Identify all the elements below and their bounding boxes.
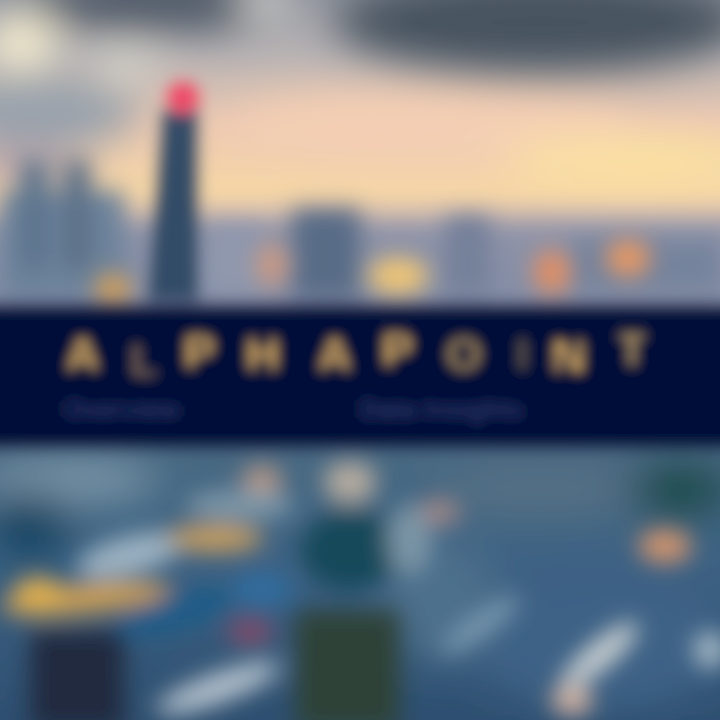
title text: O xyxy=(446,328,482,380)
subtitle text: Data Insights xyxy=(360,394,523,424)
dark title band xyxy=(0,305,720,447)
clouds xyxy=(0,0,720,81)
title text: I xyxy=(516,328,529,380)
tower xyxy=(148,81,200,300)
street details xyxy=(0,462,720,720)
title text: L xyxy=(130,334,158,386)
title text xyxy=(66,324,646,386)
title text: A xyxy=(66,328,99,380)
title text: N xyxy=(552,330,585,382)
sky background xyxy=(0,0,720,320)
subtitle text: Overview xyxy=(64,394,180,424)
title text: A xyxy=(318,328,351,380)
city lights xyxy=(95,240,650,304)
city skyline xyxy=(0,160,720,310)
lower street scene background xyxy=(0,440,720,720)
title text: T xyxy=(618,324,646,376)
title text: P xyxy=(184,326,215,378)
title text: P xyxy=(382,324,413,376)
title text: H xyxy=(246,328,279,380)
subtitle text xyxy=(64,394,523,424)
